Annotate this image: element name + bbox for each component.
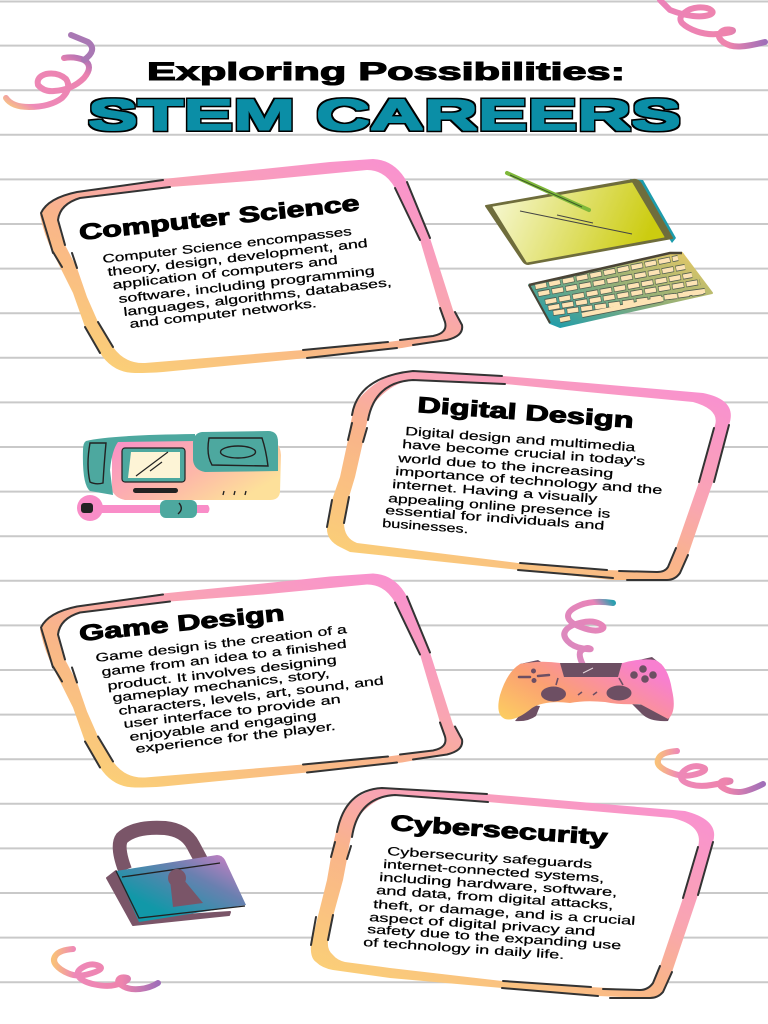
- text block: Digital Design description: essential for individuals and: [385, 503, 605, 533]
- decorative spiral: above gamepad: [564, 602, 613, 665]
- text block: Digital Design description: businesses.: [382, 516, 469, 536]
- decorative spiral: top right: [660, 0, 765, 47]
- text block: Cybersecurity description: [363, 844, 636, 962]
- icon: padlock: [107, 828, 246, 925]
- decorative spiral: bottom left: [54, 949, 158, 989]
- text block: Computer Science description: and computer networks.: [129, 296, 317, 331]
- text block: Game Design description: Game design is the creation of a: [95, 622, 348, 665]
- text block: Digital Design description: have become crucial in today's: [402, 437, 646, 468]
- icon: game controller: [498, 657, 674, 721]
- text block: Cybersecurity description: theft, or damage, and is a crucial: [373, 897, 636, 928]
- icon: video camera: [77, 431, 281, 521]
- text block: Cybersecurity description: including hardware, software,: [379, 870, 618, 899]
- text block: Cybersecurity description: safety due to the expanding use: [367, 922, 622, 952]
- text block: Computer Science description: Computer Science encompasses: [102, 224, 352, 266]
- text block: Game Design description: [95, 622, 384, 756]
- icon: tablet: [486, 173, 676, 264]
- text block: Game Design description: enjoyable and engaging: [129, 708, 317, 744]
- text block: Cybersecurity description: and data, from digital attacks,: [376, 883, 614, 912]
- heading: Digital Design: Digital Design: [417, 392, 634, 433]
- title line: STEM CAREERS: STEM CAREERS: [88, 92, 681, 140]
- text block: Digital Design description: [382, 424, 663, 536]
- text block: Game Design description: game from an idea to a finished: [101, 637, 347, 679]
- text block: Game Design description: user interface to provide an: [123, 692, 341, 731]
- decorative spiral: mid right: [658, 751, 763, 792]
- heading: Computer Science: Computer Science: [78, 190, 361, 245]
- text block: Computer Science description: software, including programming: [118, 263, 375, 306]
- heading: Game Design: Game Design: [78, 600, 285, 646]
- panel: Digital Design: [327, 371, 731, 580]
- decorative spiral: top left: [6, 35, 92, 107]
- text block: Game Design description: product. It involves designing: [107, 653, 337, 693]
- heading: Cybersecurity: Cybersecurity: [390, 810, 609, 850]
- panel: Computer Science: [40, 159, 462, 373]
- text block: Digital Design description: importance of technology and the: [395, 464, 663, 497]
- text block: Digital Design description: Digital design and multimedia: [405, 424, 636, 455]
- panel: Cybersecurity: [311, 788, 714, 998]
- text block: Cybersecurity description: of technology in daily life.: [363, 935, 565, 962]
- text block: Computer Science description: [102, 224, 392, 331]
- text block: Game Design description: characters, levels, art, sound, and: [118, 673, 384, 718]
- text block: Digital Design description: internet. Having a visually: [392, 477, 598, 506]
- text block: Cybersecurity description: Cybersecurity safeguards: [387, 844, 593, 871]
- icon: keyboard: [529, 253, 712, 327]
- text block: Game Design description: gameplay mechanics, story,: [112, 666, 330, 705]
- text block: Digital Design description: appealing online presence is: [388, 491, 611, 521]
- text block: Computer Science description: languages, algorithms, databases,: [123, 275, 392, 319]
- title line: Exploring Possibilities: Exploring Possibilities:: [147, 58, 625, 86]
- icon: tablet and keyboard: [486, 173, 712, 327]
- text block: Computer Science description: theory, design, development, and: [107, 236, 368, 279]
- text block: Digital Design description: world due to the increasing: [396, 451, 614, 480]
- text block: Cybersecurity description: aspect of digital privacy and: [369, 910, 596, 939]
- text block: Game Design description: experience for the player.: [135, 719, 336, 756]
- text block: Cybersecurity description: internet-connected systems,: [383, 857, 605, 885]
- panel: Game Design: [40, 574, 462, 788]
- text block: Computer Science description: application of computers and: [112, 253, 338, 292]
- title: [88, 58, 681, 140]
